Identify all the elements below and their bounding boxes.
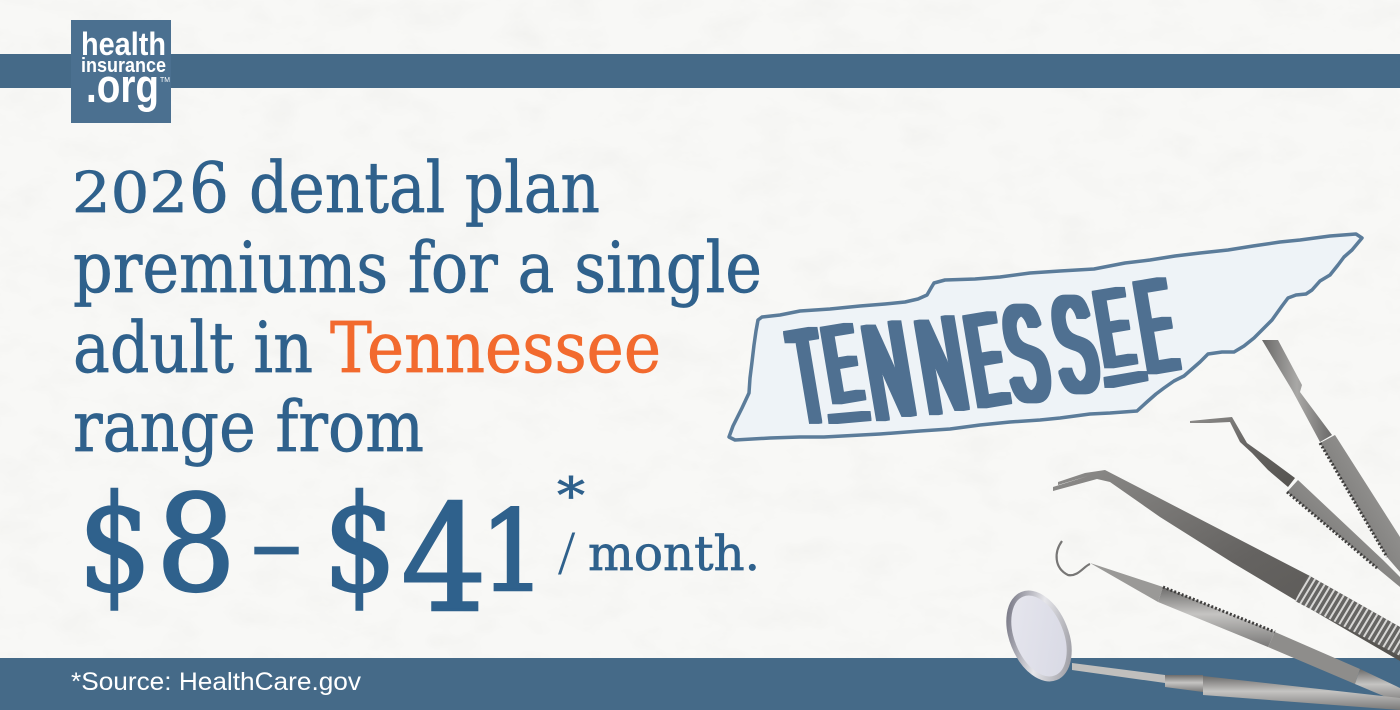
premium range: 1	[480, 488, 546, 617]
per month label: month.	[588, 526, 760, 582]
premium range	[78, 468, 546, 645]
tool: second probe	[1190, 417, 1400, 587]
premium range: –	[250, 481, 303, 605]
premium range: 4	[401, 474, 487, 645]
state name lettering: E	[1089, 265, 1140, 392]
premium range: 8	[156, 468, 236, 622]
logo: healthinsurance.org: TM	[160, 77, 170, 84]
state name lettering: E	[1128, 251, 1185, 403]
state name lettering: S	[994, 273, 1058, 434]
Tennessee state shape	[729, 234, 1362, 454]
tool: tweezers	[1053, 470, 1400, 661]
logo: healthinsurance.org: .org	[86, 59, 159, 112]
state name lettering	[782, 251, 1185, 454]
per month label	[558, 520, 760, 588]
premium range: $	[78, 468, 152, 622]
asterisk: *	[557, 467, 585, 525]
tool: dental mirror	[997, 584, 1400, 710]
headline	[72, 147, 762, 468]
state name lettering: N	[856, 292, 922, 451]
source note: *Source: HealthCare.gov	[71, 668, 362, 696]
state name lettering: E	[817, 301, 868, 428]
tool: spatula	[1262, 340, 1400, 572]
logo: healthinsurance.org: insurance	[81, 55, 166, 77]
highlighted state name: Tennessee	[330, 307, 661, 389]
per month label: /	[558, 520, 576, 588]
state name lettering: S	[1043, 264, 1107, 425]
top banner bar	[0, 54, 1400, 88]
year, old-style figures: 202	[72, 161, 188, 226]
logo: healthinsurance.org: health	[81, 26, 166, 62]
year, old-style figures	[72, 149, 229, 229]
headline: adult in	[73, 307, 313, 389]
premium range: $	[323, 468, 397, 622]
bottom banner bar	[0, 658, 1400, 710]
headline: premiums for a single	[73, 227, 762, 309]
year, old-style figures: 6	[189, 149, 229, 229]
dental tools	[997, 340, 1400, 710]
logo: healthinsurance.org	[71, 20, 171, 123]
state name lettering: N	[909, 287, 975, 445]
state name lettering: T	[782, 299, 834, 454]
state name lettering: E	[958, 285, 1015, 437]
headline: dental plan	[249, 147, 600, 229]
headline: range from	[73, 386, 424, 468]
tool: hook probe	[1057, 541, 1400, 703]
